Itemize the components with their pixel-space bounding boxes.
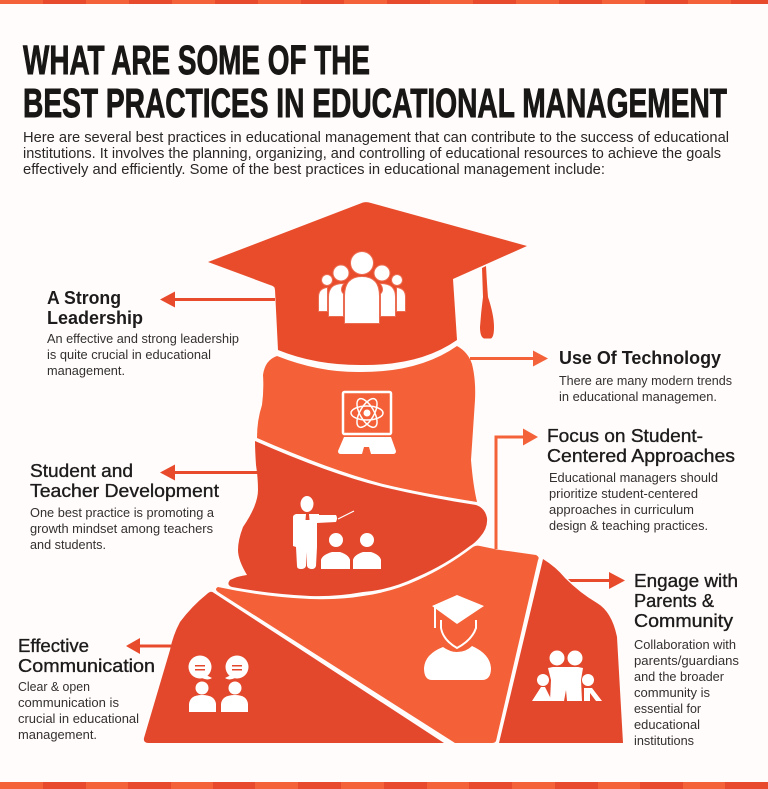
text block: student and teacher development: Teacher Development	[30, 481, 219, 501]
text block: a strong leadership	[47, 288, 239, 378]
arrow: effective communication	[126, 638, 173, 654]
arrow: student and teacher development	[160, 464, 258, 480]
icon: family	[532, 650, 602, 701]
text block: a strong leadership: management.	[47, 364, 125, 378]
text block: use of technology: Use Of Technology	[559, 348, 721, 368]
section: communication	[144, 592, 444, 743]
text block: effective communication: management.	[18, 728, 97, 742]
text block: effective communication: Clear & open	[18, 680, 90, 694]
text block: use of technology: There are many modern trends	[559, 374, 732, 388]
cap section	[208, 202, 527, 365]
text block: student and teacher development: and students.	[30, 538, 106, 552]
text block: engage with parents and community: Parents &	[634, 591, 714, 611]
text block: engage with parents and community	[634, 571, 739, 748]
arrow: parents and community	[568, 572, 625, 589]
text block: effective communication: crucial in educational	[18, 712, 139, 726]
text block: student and teacher development	[30, 461, 219, 552]
icon: laptop with atom	[338, 392, 396, 454]
icon: two people talking	[188, 656, 248, 712]
text block: focus on student-centered approaches	[547, 426, 735, 533]
cap tassel	[480, 266, 494, 338]
text block: engage with parents and community: essential for	[634, 702, 701, 716]
text block: engage with parents and community: institutions	[634, 734, 694, 748]
section: student-centered	[216, 546, 539, 743]
text block: engage with parents and community: Collaboration with	[634, 638, 736, 652]
text block: use of technology: in educational managemen.	[559, 390, 717, 404]
intro paragraph: Here are several best practices in educational management that can contribute to the success of educational	[23, 130, 729, 146]
bottom decorative band	[0, 782, 768, 789]
title: WHAT ARE SOME OF THE	[23, 37, 370, 83]
text block: student and teacher development: Student and	[30, 461, 133, 481]
text block: a strong leadership: A Strong	[47, 288, 121, 308]
text block: engage with parents and community: parents/guardians	[634, 654, 739, 668]
text block: effective communication: Effective	[18, 636, 89, 656]
arrow: technology	[470, 350, 548, 366]
intro paragraph	[23, 130, 729, 178]
icon: graduate student	[424, 595, 491, 680]
text block: focus on student-centered approaches: Focus on Student-	[547, 426, 703, 446]
text block: a strong leadership: is quite crucial in educational	[47, 348, 211, 362]
section: development	[228, 441, 487, 596]
text block: a strong leadership: An effective and strong leadership	[47, 332, 239, 346]
text block: focus on student-centered approaches: approaches in curriculum	[549, 503, 694, 517]
arrow: student-centered	[494, 428, 538, 549]
icon: teacher with students	[293, 496, 381, 569]
text block: engage with parents and community: community is	[634, 686, 710, 700]
text block: focus on student-centered approaches: design & teaching practices.	[549, 519, 708, 533]
text block: focus on student-centered approaches: Centered Approaches	[547, 446, 735, 466]
text block: effective communication: Communication	[18, 656, 155, 676]
graduation figure illustration	[144, 202, 623, 743]
title	[23, 37, 727, 126]
text block: use of technology	[559, 348, 732, 404]
text block: effective communication	[18, 636, 155, 742]
text block: effective communication: communication is	[18, 696, 119, 710]
icon: group of people	[319, 252, 405, 323]
text block: engage with parents and community: Community	[634, 611, 733, 631]
text block: student and teacher development: One best practice is promoting a	[30, 506, 214, 520]
top decorative band	[0, 0, 768, 4]
text block: focus on student-centered approaches: prioritize student-centered	[549, 487, 698, 501]
text block: student and teacher development: growth mindset among teachers	[30, 522, 213, 536]
section: technology	[257, 346, 477, 502]
intro paragraph: effectively and efficiently. Some of the best practices in educational management include:	[23, 162, 605, 178]
intro paragraph: institutions. It involves the planning, organizing, and controlling of educational resources to achieve the goals	[23, 146, 721, 162]
arrow: leadership	[160, 292, 275, 308]
text block: engage with parents and community: and the broader	[634, 670, 724, 684]
text block: engage with parents and community: Engage with	[634, 571, 738, 591]
text block: a strong leadership: Leadership	[47, 308, 143, 328]
section: parents and community	[499, 559, 623, 743]
text block: engage with parents and community: educational	[634, 718, 700, 732]
text block: focus on student-centered approaches: Educational managers should	[549, 471, 718, 485]
